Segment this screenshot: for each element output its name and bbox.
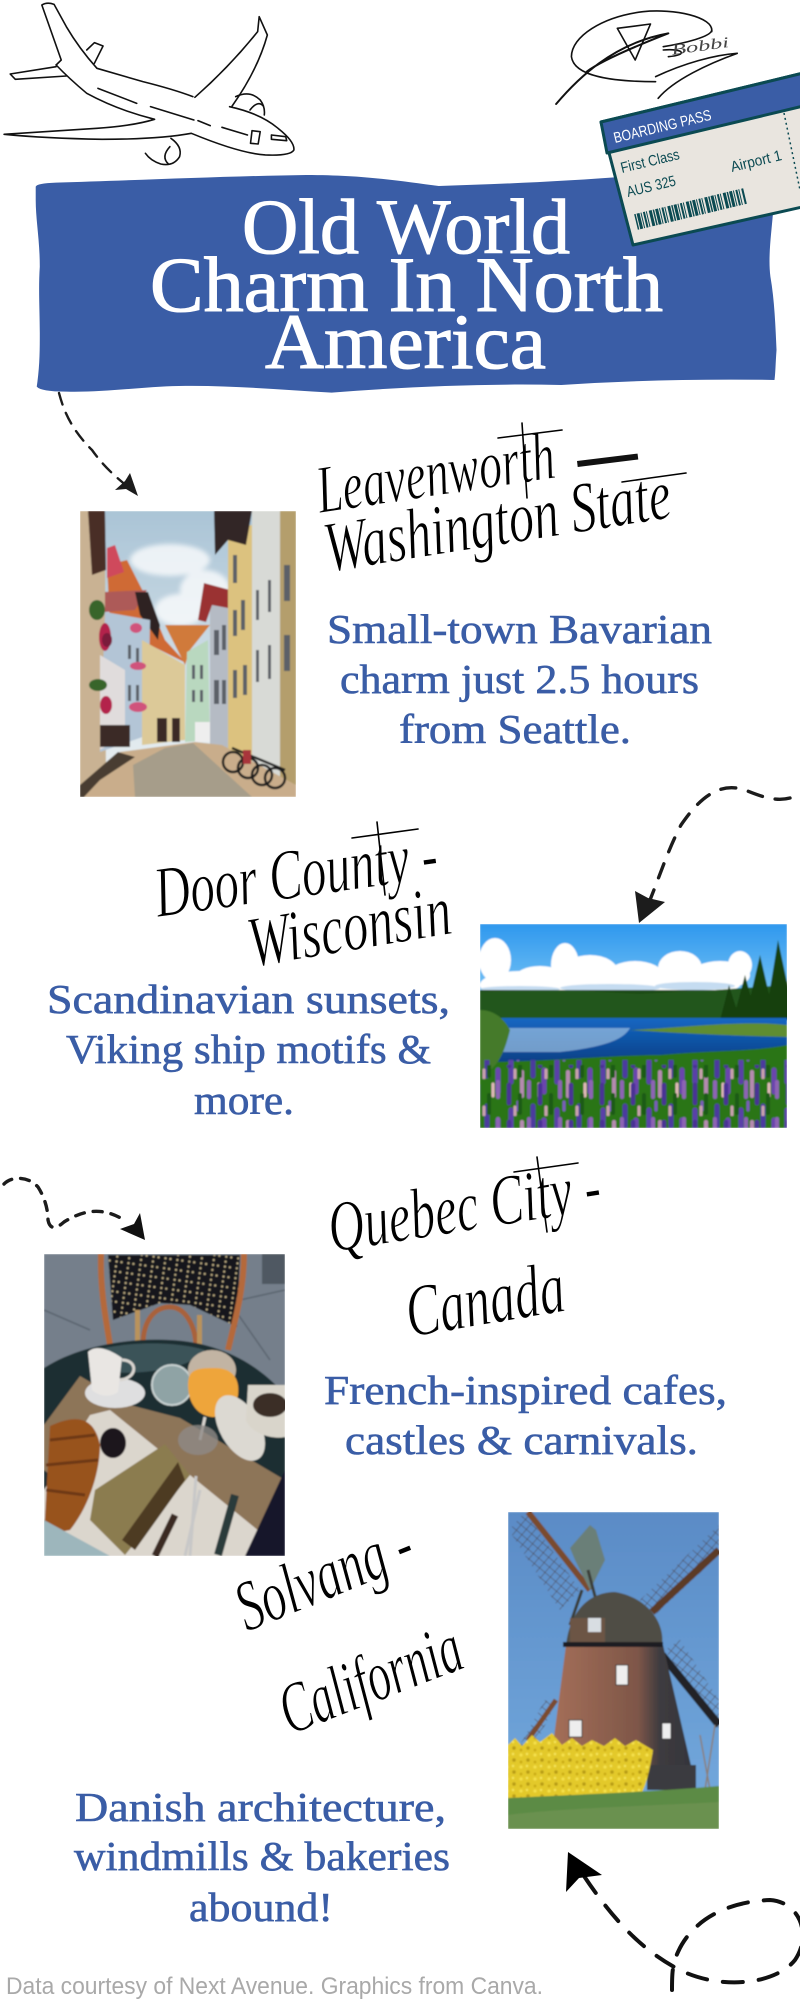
description: Solvang: windmills & bakeries [74,1833,450,1879]
footer credit: Data courtesy of Next Avenue. Graphics from Canva. [6,1973,543,2000]
signature name: Bobbi [670,35,730,59]
title text: Charm In North [150,241,663,328]
icon: boarding pass: BOARDING PASS [612,107,713,147]
description: Quebec City: castles & carnivals. [345,1417,698,1463]
description: Quebec City [324,1367,727,1463]
description: Solvang: Danish architecture, [75,1784,446,1830]
banner shape [36,175,777,393]
title text: America [265,298,546,385]
photo: Bavarian street [80,511,296,797]
heading: Door County Wisconsin: Door County - [148,814,442,933]
icon: boarding pass: First Class [619,146,681,177]
description: Leavenworth: from Seattle. [399,706,631,752]
photo: cafe breakfast [44,1254,287,1556]
title banner [36,175,777,393]
heading: Quebec City Canada: Quebec City - [322,1146,606,1268]
heading: Solvang California [223,1503,473,1750]
heading: Door County Wisconsin [148,814,457,983]
description: Quebec City: French-inspired cafes, [324,1367,727,1413]
icon: boarding pass: AUS 325 [625,173,678,201]
icon: signature [556,11,737,104]
description: Door County: Scandinavian sunsets, [47,976,450,1022]
heading: Door County Wisconsin: Wisconsin [241,870,457,983]
arrow: loop to windmill photo [566,1852,800,1990]
arrow: to lake photo [635,788,790,923]
arrow: banner to first photo [59,393,138,496]
description: Leavenworth [327,606,712,752]
title text [150,183,663,385]
heading: Solvang California: Solvang - [223,1503,425,1647]
icon: boarding pass: Airport 1 [729,147,783,176]
heading: Quebec City Canada [322,1146,606,1354]
description: Door County [47,976,450,1123]
heading: Solvang California: California [267,1607,473,1750]
photo: windmill [508,1512,719,1829]
description: Leavenworth: charm just 2.5 hours [340,656,699,702]
heading: Leavenworth Washington State: Leavenworth [310,417,560,528]
title text: Old World [242,183,570,270]
heading: Quebec City Canada: Canada [399,1246,571,1354]
icon: boarding pass [601,69,800,245]
arrow: to cafe photo [4,1178,145,1240]
description: Solvang: abound! [189,1884,333,1930]
description: Solvang [74,1784,450,1930]
photo: lake and lupines [479,924,795,1128]
description: Leavenworth: Small-town Bavarian [327,606,712,652]
description: Door County: more. [194,1077,294,1123]
icon: airplane sketch [4,3,294,165]
description: Door County: Viking ship motifs & [66,1026,431,1072]
